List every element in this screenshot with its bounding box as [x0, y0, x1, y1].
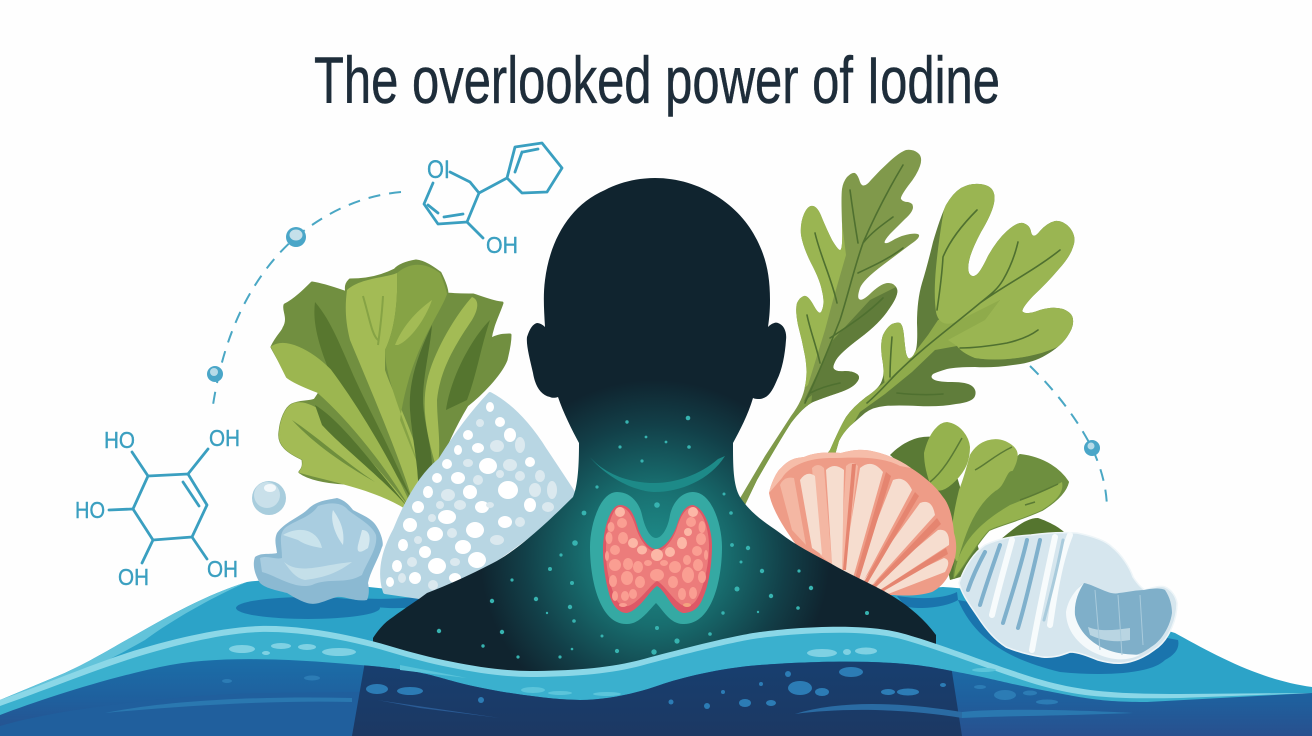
molecule top: OI	[427, 156, 450, 184]
title: The overlooked power of Iodine	[314, 43, 1000, 117]
conch opening	[1070, 583, 1172, 657]
salt pile	[382, 394, 578, 600]
molecule left: HO	[104, 427, 135, 453]
molecule left: OH	[207, 556, 238, 582]
thyroid lobes	[603, 505, 712, 613]
bubble beside rock	[252, 481, 286, 515]
conch shell	[959, 533, 1177, 663]
molecule left: HO	[75, 497, 105, 523]
neck arc	[588, 455, 725, 492]
thyroid gland	[590, 492, 722, 624]
molecule left: OH	[209, 425, 240, 451]
molecule top: OH	[486, 232, 518, 258]
back water surface	[0, 580, 1312, 736]
ripples	[229, 643, 877, 657]
dashed arc right with bubble	[1030, 366, 1107, 510]
molecule left: OH	[118, 564, 149, 590]
seaweed right thin leaf	[736, 150, 921, 505]
rock	[254, 498, 383, 604]
scallop shell	[769, 450, 956, 596]
body under water	[352, 662, 962, 736]
seaweed right large leaf	[828, 184, 1074, 453]
thyroid halo	[590, 492, 722, 624]
head and shoulders silhouette	[373, 178, 936, 700]
molecule left	[75, 425, 240, 590]
molecule top	[424, 143, 562, 258]
front water waves	[0, 626, 1312, 736]
small leaves behind shell	[890, 423, 1068, 580]
seaweed left	[272, 261, 510, 512]
dashed arc left with bubbles	[207, 192, 401, 405]
particles in chest	[437, 416, 869, 659]
